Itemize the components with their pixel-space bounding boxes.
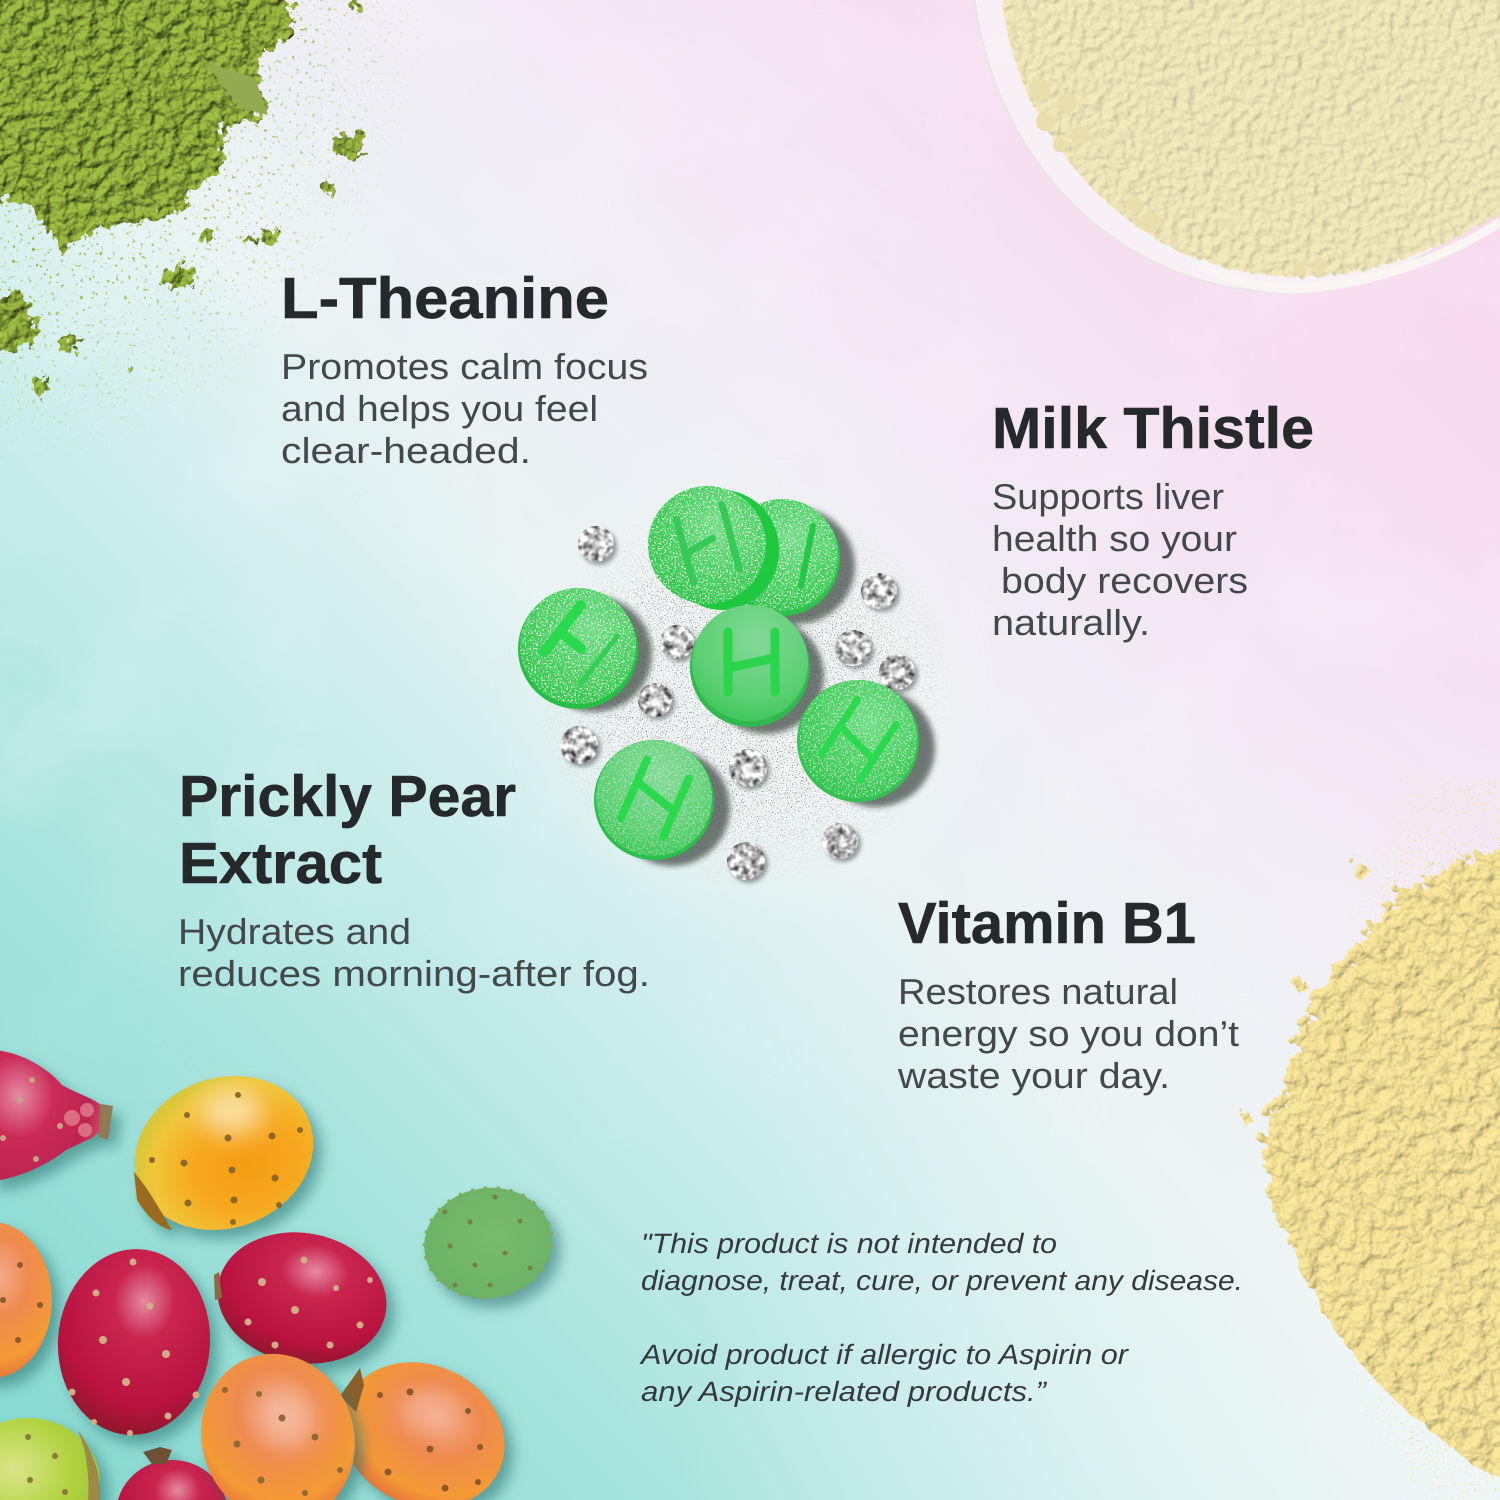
text: Milk Thistle description: Supports liver xyxy=(992,476,1224,517)
text: disclaimer: "This product is not intended to xyxy=(641,1228,1057,1259)
fruit: lime bottom left xyxy=(0,1418,100,1500)
crystal shadows xyxy=(563,529,918,883)
fruit: right red xyxy=(207,1219,397,1377)
crystals xyxy=(560,526,915,880)
heading: L-Theanine: L-Theanine xyxy=(281,266,609,331)
text: disclaimer: Avoid product if allergic to Aspirin or xyxy=(639,1339,1130,1370)
image: yellow vitamin powder xyxy=(1240,780,1500,1500)
fruit: orange left xyxy=(0,1222,52,1378)
image: green matcha powder xyxy=(0,0,430,470)
text: Vitamin B1 description: waste your day. xyxy=(897,1055,1170,1096)
heading: Vitamin B1: Vitamin B1 xyxy=(898,891,1196,956)
tablet: right xyxy=(797,680,919,802)
text: Vitamin B1 description: Restores natural xyxy=(898,971,1178,1012)
fruit: small red bottom xyxy=(116,1447,228,1500)
text: Milk Thistle description: naturally. xyxy=(992,602,1150,643)
fruit: yellow xyxy=(113,1051,335,1255)
text: L-Theanine description: clear-headed. xyxy=(281,430,531,471)
tablet: top xyxy=(648,486,779,610)
tablet: center xyxy=(690,605,810,727)
text: disclaimer: diagnose, treat, cure, or prevent any disease. xyxy=(641,1265,1243,1296)
text: L-Theanine description: Promotes calm focus xyxy=(281,346,648,387)
text: Milk Thistle description: body recovers xyxy=(1001,560,1248,601)
heading: Prickly Pear Extract: Extract xyxy=(179,831,382,896)
fruit: large red xyxy=(52,1244,216,1440)
text: Prickly Pear description: Hydrates and xyxy=(178,911,411,952)
text: Milk Thistle description xyxy=(992,476,1248,643)
text: Vitamin B1 description: energy so you don’t xyxy=(898,1013,1239,1054)
heading: Milk Thistle: Milk Thistle xyxy=(992,396,1314,461)
text: Milk Thistle description: health so your xyxy=(992,518,1237,559)
fruit: pink top left xyxy=(0,1050,113,1182)
heading: Prickly Pear Extract: Prickly Pear xyxy=(179,764,516,829)
tablet: left xyxy=(518,588,638,709)
speckled dust xyxy=(536,496,954,883)
fruit: green cactus pad xyxy=(415,1178,561,1308)
text: Prickly Pear description xyxy=(178,911,650,994)
image: cream milk thistle powder in dish xyxy=(972,0,1500,292)
text: disclaimer: any Aspirin-related products.” xyxy=(641,1376,1048,1407)
text: L-Theanine description xyxy=(281,346,648,471)
heading: Prickly Pear Extract xyxy=(179,764,516,896)
tablet shadows xyxy=(536,508,935,866)
tablet: back xyxy=(746,499,840,616)
fruit: orange center xyxy=(179,1334,377,1500)
text: Prickly Pear description: reduces morning-after fog. xyxy=(178,953,650,994)
text: L-Theanine description: and helps you feel xyxy=(281,388,598,429)
text: Vitamin B1 description xyxy=(897,971,1239,1096)
text: disclaimer xyxy=(639,1228,1243,1407)
white haze xyxy=(555,510,935,870)
fruit: orange right xyxy=(317,1336,529,1500)
tablet: bottom xyxy=(594,740,714,860)
image: green tablets and crystals xyxy=(518,486,954,886)
image: prickly pear fruits xyxy=(0,1050,561,1500)
